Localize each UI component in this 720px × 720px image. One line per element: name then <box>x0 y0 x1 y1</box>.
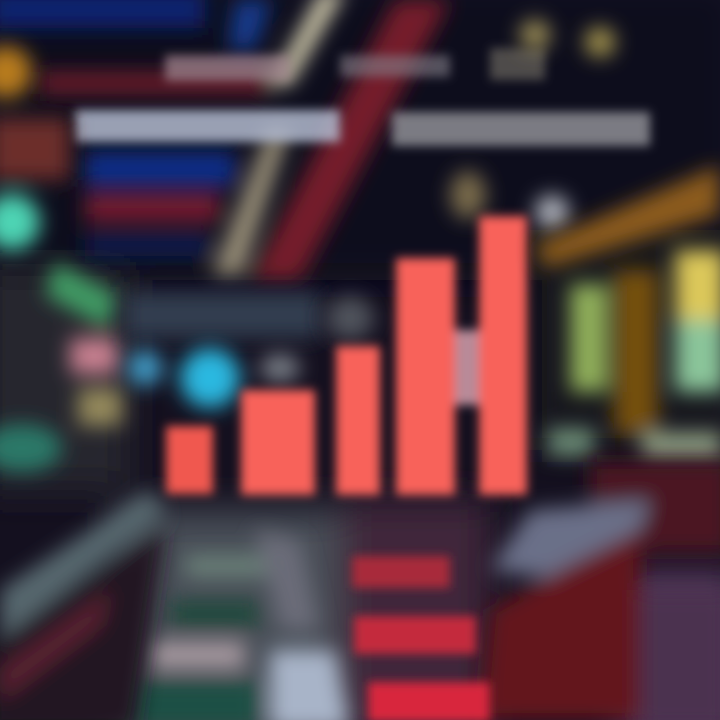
red steps <box>352 556 490 720</box>
chart header band <box>125 292 320 338</box>
bar chart <box>166 216 527 495</box>
bottom centre table <box>125 530 350 720</box>
title text block (illegible in reference) <box>75 48 650 146</box>
bar 5 <box>479 216 527 495</box>
bar 2 <box>241 390 315 495</box>
bar 3 <box>336 346 380 495</box>
left side icons <box>0 46 122 472</box>
bar gap highlight <box>452 330 482 405</box>
right side windows and beam <box>535 165 720 460</box>
cyan data dots <box>127 296 374 408</box>
flag stripes <box>0 0 450 280</box>
bar 1 <box>166 426 213 494</box>
bottom right seating <box>480 462 720 720</box>
left counter <box>0 490 165 720</box>
decorative lights <box>450 20 615 229</box>
bar 4 <box>396 258 455 495</box>
